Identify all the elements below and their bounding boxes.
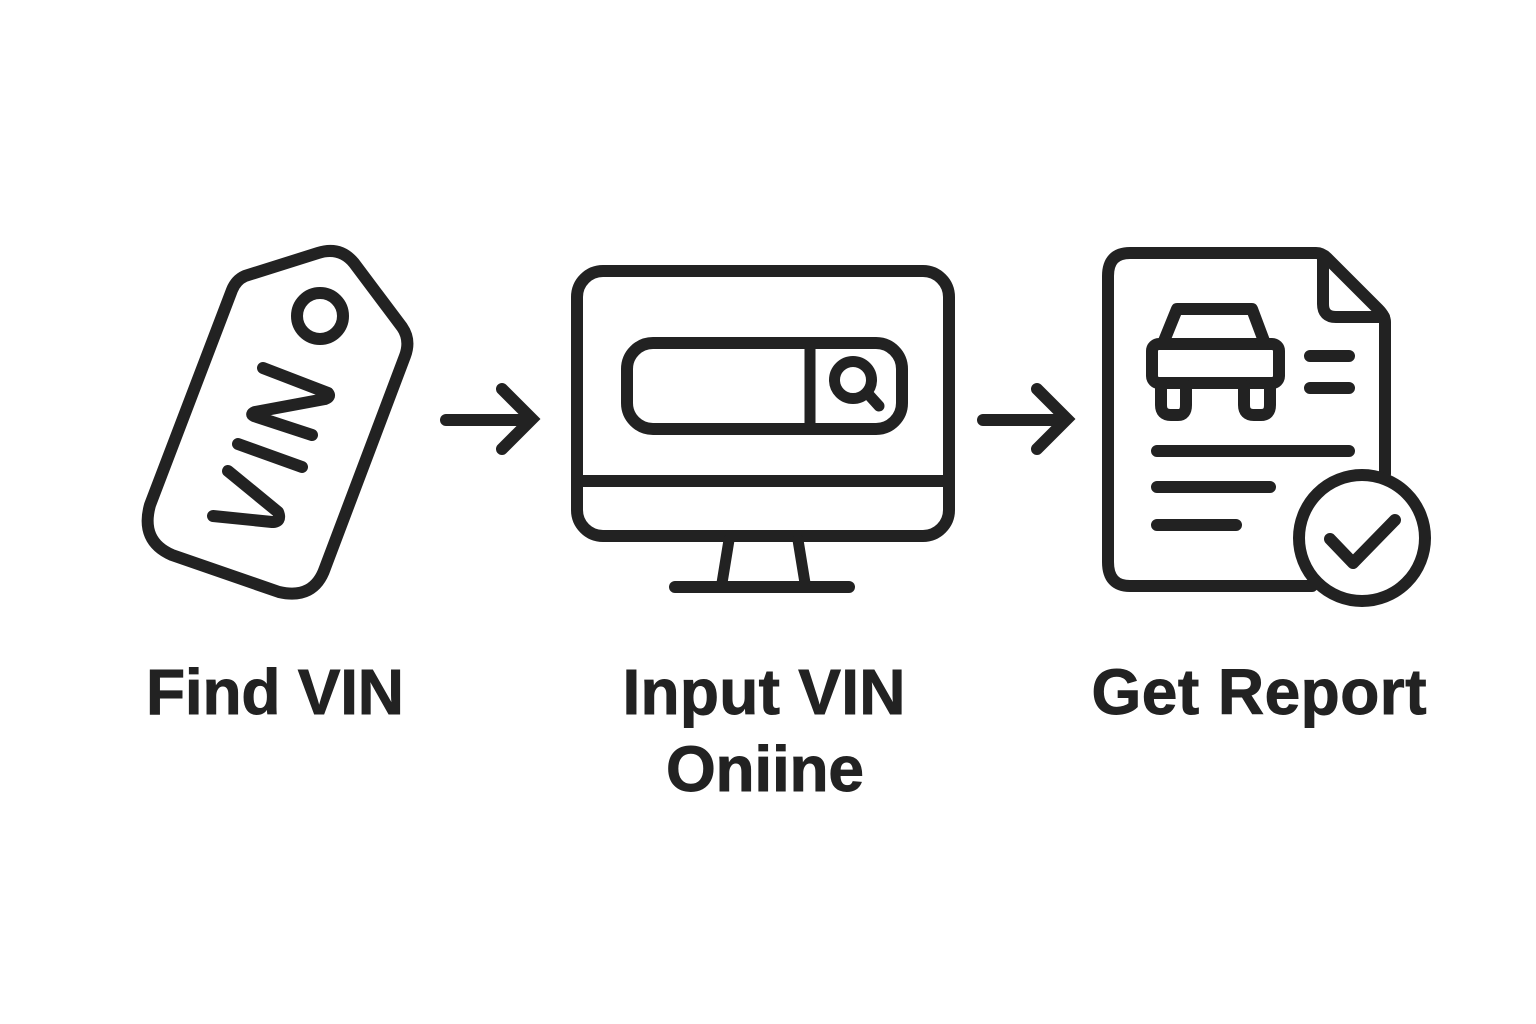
check badge bbox=[1299, 475, 1425, 601]
arrow: step 1 to step 2 bbox=[446, 389, 532, 449]
icon: VIN tag bbox=[148, 251, 407, 594]
car bbox=[1152, 309, 1279, 415]
icon: computer monitor with search bar bbox=[577, 271, 949, 587]
label: Get Report: Get Report bbox=[1092, 656, 1426, 728]
label: Input VIN Online: Oniine bbox=[666, 733, 864, 805]
icon: report document with car and check badge bbox=[1108, 253, 1425, 601]
label: Find VIN: Find VIN bbox=[146, 656, 404, 728]
label: Input VIN Online: Input VIN bbox=[622, 656, 906, 728]
label: Input VIN Online bbox=[622, 656, 906, 805]
arrow: step 2 to step 3 bbox=[983, 389, 1067, 449]
search bar bbox=[627, 343, 902, 429]
